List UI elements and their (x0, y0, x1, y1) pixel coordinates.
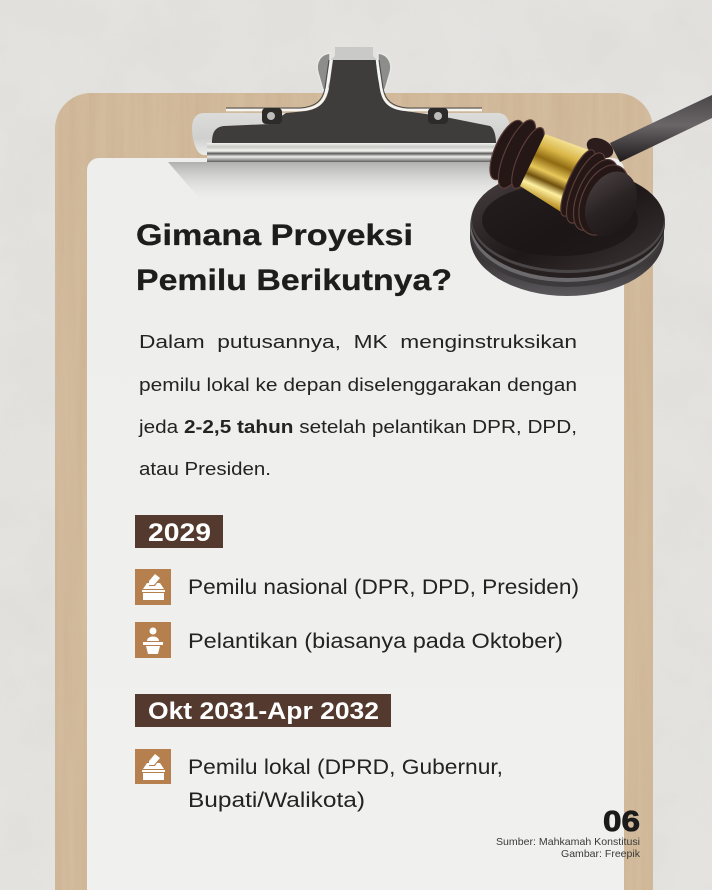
title (136, 219, 452, 297)
icon: podium speaker (135, 622, 171, 658)
section Okt 2031-Apr 2032 heading (135, 694, 391, 727)
list item: inauguration: Pelantikan (biasanya pada Oktober) (188, 630, 563, 653)
list item: national election: Pemilu nasional (DPR, DPD, Presiden) (188, 576, 579, 599)
gavel: brass band (520, 134, 589, 212)
intro paragraph: atau Presiden. (139, 459, 271, 479)
clip: wire spring (226, 60, 482, 110)
clip: left rivet (262, 108, 282, 124)
section 2029 heading: 2029 (148, 519, 211, 547)
section 2029 heading (135, 515, 223, 548)
clip: right rivet (428, 108, 448, 124)
source credits (496, 836, 641, 860)
list item: local election: Bupati/Walikota) (188, 789, 365, 812)
metal clipboard clip (192, 47, 510, 162)
clip: top tab (331, 47, 377, 60)
clip: silver plate (192, 113, 510, 155)
source credits: Sumber: Mahkamah Konstitusi (496, 836, 640, 848)
gavel: handle (610, 95, 712, 162)
gavel: right rings (554, 146, 639, 243)
list item: local election: Pemilu lokal (DPRD, Gubernur, (188, 756, 503, 779)
judge gavel (470, 95, 712, 296)
page number: 06 (603, 806, 640, 838)
clipboard wooden board (55, 93, 653, 890)
icon: ballot box (135, 749, 171, 784)
gavel: striking face (575, 163, 647, 245)
clip: black body (212, 60, 496, 143)
gavel: sound block base (470, 168, 665, 296)
list item: local election (188, 756, 503, 812)
section Okt 2031-Apr 2032 heading: Okt 2031-Apr 2032 (148, 698, 379, 725)
intro paragraph: Dalam putusannya, MK menginstruksikan (139, 332, 577, 352)
clip: rolled bar (207, 143, 495, 162)
intro paragraph: pemilu lokal ke depan diselenggarakan dengan (139, 375, 577, 395)
intro paragraph: jeda 2-2,5 tahun setelah pelantikan DPR, DPD, (138, 417, 577, 437)
intro paragraph (138, 332, 577, 479)
gavel: left rings (483, 115, 551, 193)
title: Pemilu Berikutnya? (136, 264, 452, 297)
gavel: handle collar (584, 134, 616, 162)
clip: hinge rings (317, 53, 391, 90)
icon: ballot box (135, 569, 171, 605)
title: Gimana Proyeksi (136, 219, 413, 252)
source credits: Gambar: Freepik (561, 848, 641, 860)
paper sheet (87, 158, 624, 890)
